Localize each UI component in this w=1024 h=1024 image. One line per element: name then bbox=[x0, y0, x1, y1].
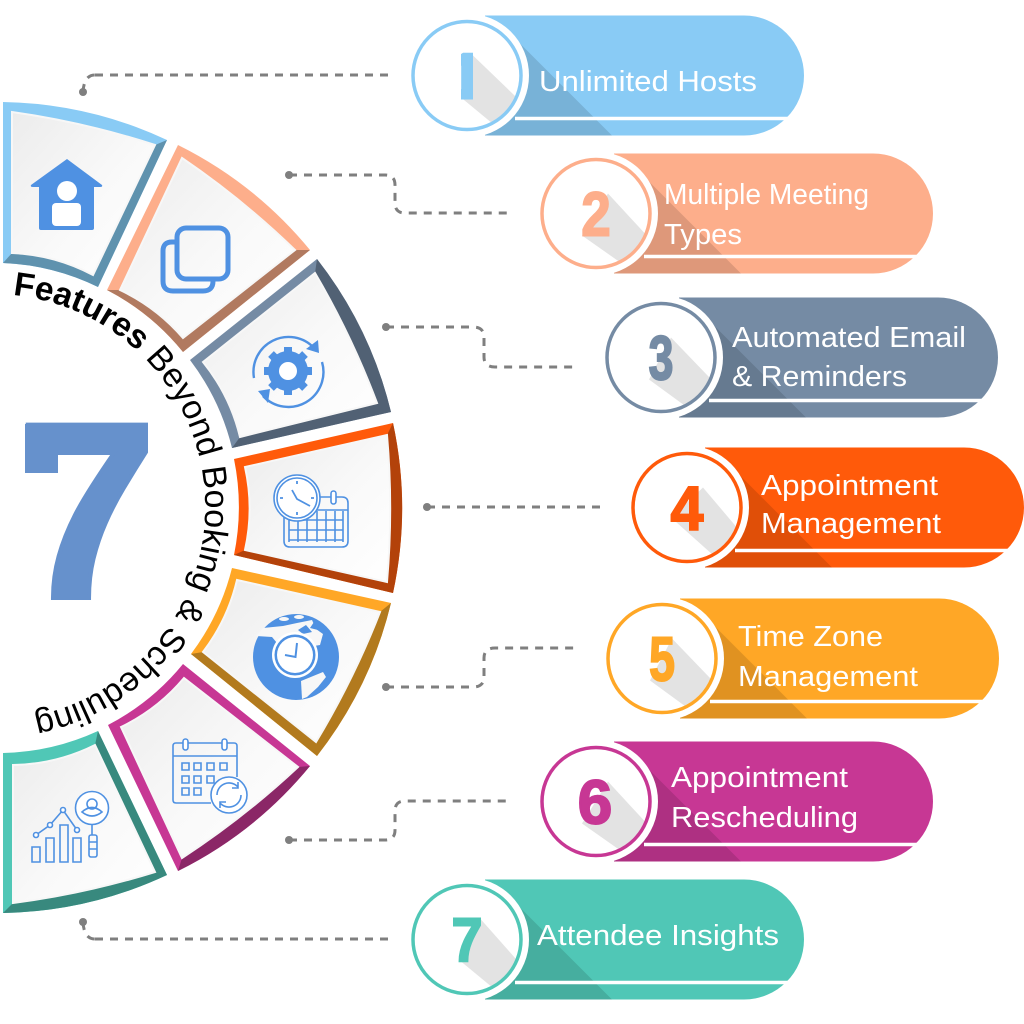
icon: clock and calendar bbox=[274, 475, 348, 547]
icon: overlapping squares bbox=[163, 228, 228, 291]
connector 3 bbox=[382, 323, 578, 367]
label: Appointment bbox=[761, 470, 938, 502]
label bbox=[738, 621, 918, 693]
pill 1: unlimited hosts bbox=[405, 14, 804, 138]
pill 7: attendee insights bbox=[405, 878, 804, 1002]
pill 2: multiple meeting types bbox=[534, 152, 933, 276]
segment 5: time zone management bbox=[191, 568, 391, 756]
connector 5 bbox=[382, 648, 578, 691]
pill 1: unlimited hosts: 1 bbox=[449, 42, 483, 112]
icon: gear with arrows bbox=[253, 337, 323, 407]
label bbox=[671, 762, 858, 834]
segment 7: attendee insights bbox=[3, 731, 167, 913]
pill 4: appointment management bbox=[625, 446, 1024, 570]
label: Rescheduling bbox=[671, 802, 858, 834]
pill 7: attendee insights: 7 bbox=[451, 907, 483, 975]
pill 5: time zone management: 5 bbox=[649, 624, 675, 694]
label: Management bbox=[738, 661, 918, 693]
pill 2: multiple meeting types: 2 bbox=[581, 181, 611, 250]
connector 1 bbox=[79, 75, 390, 96]
segment 4: appointment management bbox=[234, 423, 402, 593]
icon: house with person bbox=[31, 159, 102, 230]
label: Types bbox=[664, 219, 742, 251]
connector 4 bbox=[423, 503, 607, 511]
label bbox=[732, 322, 966, 393]
connector 2 bbox=[285, 171, 512, 213]
pill 3: automated email and reminders bbox=[599, 296, 998, 420]
label: Unlimited Hosts bbox=[539, 66, 757, 98]
connector 7 bbox=[79, 918, 390, 939]
pill 6: appointment rescheduling: 6 bbox=[578, 768, 612, 838]
segment 2: multiple meeting types bbox=[107, 145, 310, 352]
label bbox=[761, 470, 941, 540]
pill 5: time zone management bbox=[600, 596, 999, 720]
icon: globe with clock bbox=[253, 614, 339, 700]
pill 6: appointment rescheduling bbox=[534, 740, 933, 864]
big number 7: 7 bbox=[17, 371, 157, 652]
label: Appointment bbox=[671, 762, 848, 794]
segment 6: appointment rescheduling bbox=[108, 664, 310, 871]
curved title: Features Beyond Booking & Scheduling bbox=[15, 272, 228, 734]
segment 3: automated email bbox=[190, 259, 391, 448]
icon: chart with magnifier bbox=[32, 792, 108, 862]
connector 6 bbox=[285, 801, 512, 844]
label: Multiple Meeting bbox=[664, 179, 869, 211]
pill 4: appointment management: 4 bbox=[671, 473, 704, 543]
label: & Reminders bbox=[732, 361, 907, 393]
label bbox=[664, 179, 869, 251]
icon: calendar with refresh bbox=[173, 739, 247, 813]
pill 3: automated email and reminders: 3 bbox=[649, 324, 673, 393]
label: Management bbox=[761, 508, 941, 540]
segment 1: unlimited hosts bbox=[3, 102, 167, 287]
label: Automated Email bbox=[732, 322, 966, 354]
label: Attendee Insights bbox=[537, 920, 779, 952]
label: Time Zone bbox=[738, 621, 883, 653]
